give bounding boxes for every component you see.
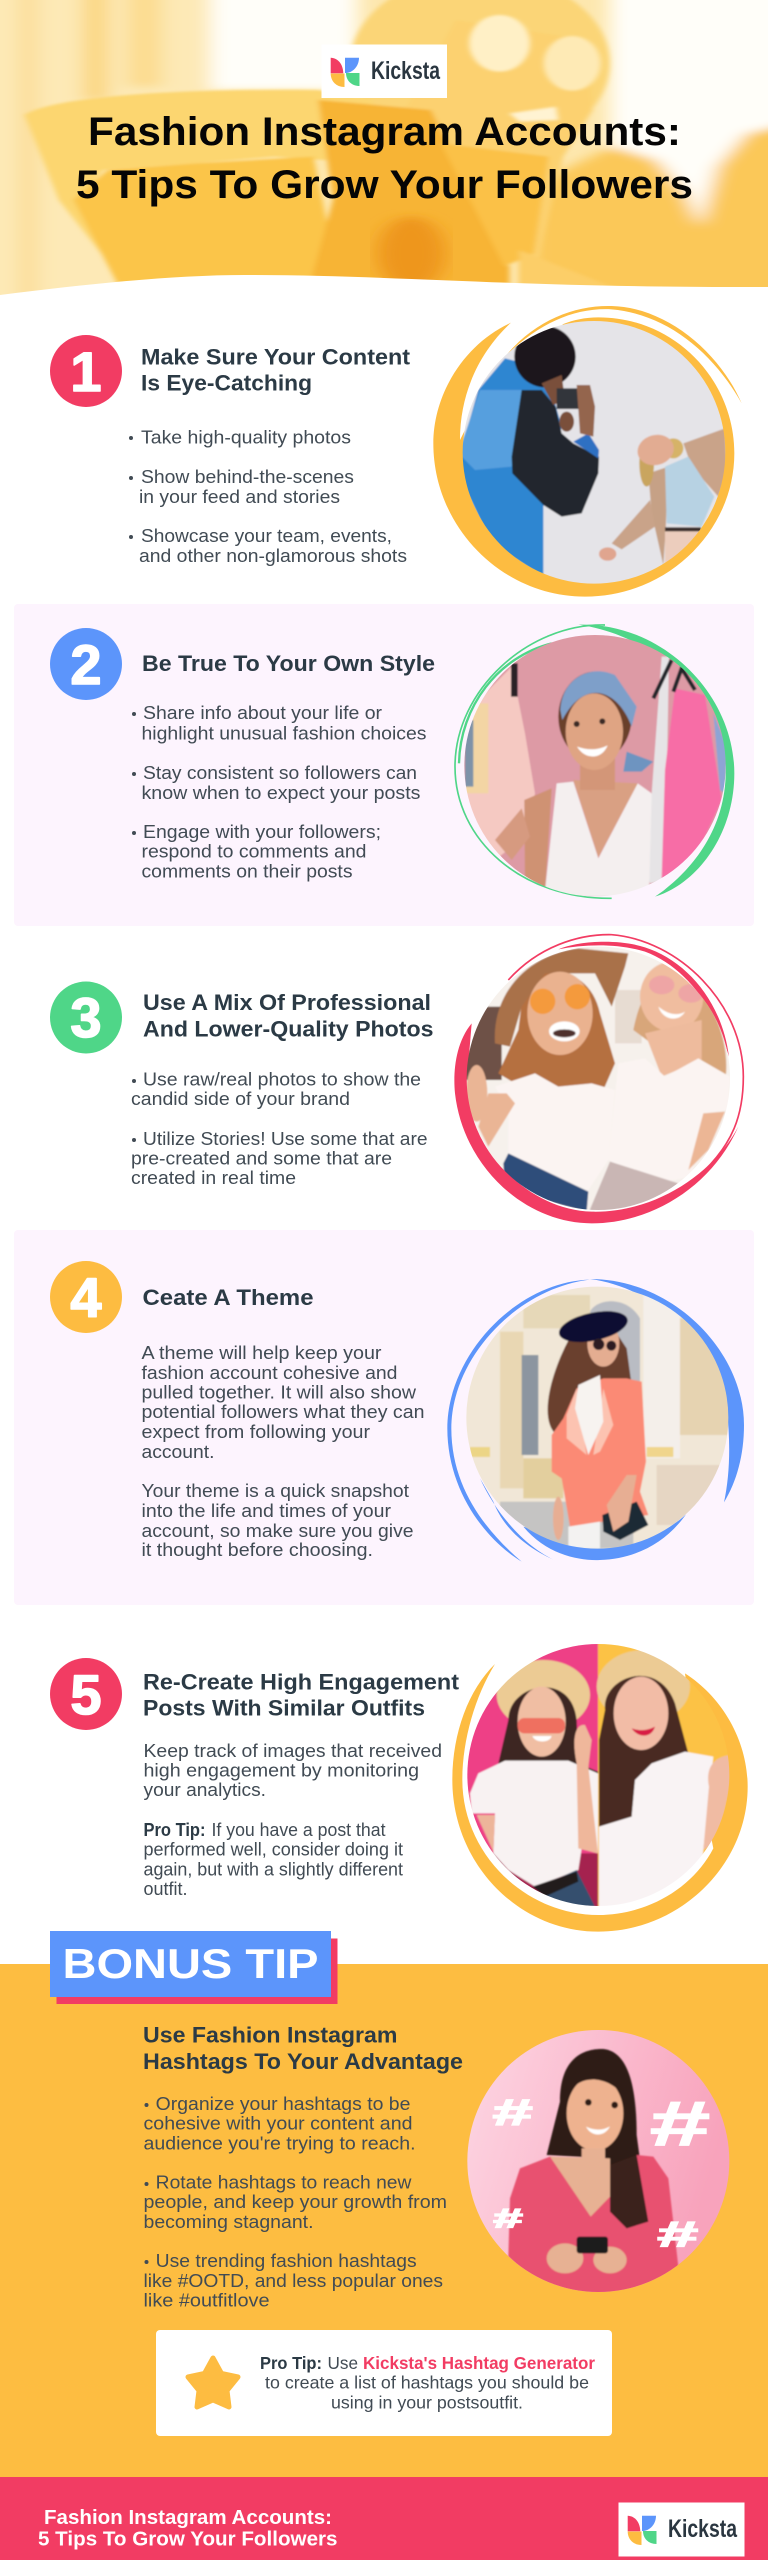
pro tip text: Use — [328, 2353, 358, 2373]
body text 4 — [142, 1342, 424, 1560]
title: 5 Tips To Grow Your Followers — [76, 163, 693, 207]
logo: Kicksta footer — [618, 2502, 744, 2556]
body text 4: expect from following your — [142, 1421, 370, 1442]
heading 5 — [143, 1670, 460, 1720]
body text 4: account. — [142, 1441, 214, 1462]
bullet list 3 — [131, 1068, 428, 1188]
pro tip text: using in your postsoutfit. — [331, 2392, 523, 2412]
bullet list 3: Use raw/real photos to show the — [143, 1068, 421, 1090]
heading 3: Use A Mix Of Professional — [143, 990, 431, 1015]
number badge 5: 5 — [70, 1663, 102, 1726]
hashtag marks — [492, 2099, 710, 2248]
panel: tip 4 — [50, 1261, 744, 1562]
bullet list 1: and other non-glamorous shots — [139, 545, 407, 566]
body text 5: If you have a post that — [212, 1819, 386, 1840]
body text 4: fashion account cohesive and — [142, 1362, 398, 1383]
header photo banner — [0, 0, 768, 320]
pro tip text: Pro Tip: — [260, 2353, 322, 2373]
pro tip text: to create a list of hashtags you should be — [265, 2372, 589, 2392]
photo 5: before and after outfits — [452, 1640, 748, 1932]
bonus heading — [143, 2022, 463, 2074]
photo 4: woman in coral blazer — [447, 1279, 744, 1562]
bullet list 3: created in real time — [131, 1167, 296, 1188]
body text 5 — [144, 1740, 442, 1899]
panel: bonus tip content — [143, 2022, 729, 2436]
bonus heading: Hashtags To Your Advantage — [143, 2049, 463, 2074]
hashtag marks: # — [493, 2204, 523, 2234]
photo 3: two friends laughing — [454, 935, 743, 1223]
callout: pro tip — [156, 2330, 612, 2436]
body text 4: A theme will help keep your — [142, 1342, 382, 1363]
white wave edge — [0, 275, 768, 310]
bullet list 1 — [129, 426, 407, 566]
body text 4: Your theme is a quick snapshot — [142, 1480, 409, 1501]
photo 2: woman at clothes rack — [455, 625, 734, 903]
bullet list 2: Engage with your followers; — [143, 821, 381, 842]
number badge 3 — [50, 982, 122, 1054]
footer band — [0, 2477, 768, 2560]
heading 1: Make Sure Your Content — [141, 344, 411, 370]
panel: tip 2 background — [14, 604, 754, 926]
footer title: 5 Tips To Grow Your Followers — [38, 2528, 338, 2550]
pro tip text — [260, 2353, 595, 2412]
number badge 1 — [50, 335, 122, 407]
bullet list 3: Utilize Stories! Use some that are — [143, 1128, 428, 1149]
body text 4: into the life and times of your — [142, 1500, 391, 1521]
body text 5: again, but with a slightly different — [144, 1858, 403, 1880]
bonus bullet list: like #OOTD, and less popular ones — [144, 2270, 443, 2291]
body text 5: your analytics. — [144, 1779, 266, 1800]
panel: tip 2 — [50, 625, 734, 903]
photo 6: woman with phone and hashtags — [467, 2030, 729, 2295]
title: Fashion Instagram Accounts: — [88, 110, 681, 154]
bullet list 3: pre-created and some that are — [131, 1148, 392, 1168]
body text 5: Keep track of images that received — [144, 1740, 442, 1761]
body text 4: it thought before choosing. — [142, 1539, 373, 1560]
title — [76, 110, 693, 207]
body text 5: performed well, consider doing it — [144, 1838, 403, 1860]
bonus bullet list: Use trending fashion hashtags — [156, 2250, 417, 2271]
panel: tip 1 — [50, 306, 742, 597]
bullet list 1: Show behind-the-scenes — [141, 466, 354, 487]
heading 4: Ceate A Theme — [142, 1285, 314, 1310]
body text 5: outfit. — [144, 1878, 188, 1899]
hashtag marks: # — [493, 2092, 533, 2133]
heading 2: Be True To Your Own Style — [142, 651, 435, 676]
number badge 4: 4 — [70, 1266, 102, 1329]
number badge 2: 2 — [70, 633, 102, 696]
bonus bullet list: like #outfitlove — [144, 2290, 270, 2310]
heading 5: Posts With Similar Outfits — [143, 1696, 425, 1720]
body text 5: Pro Tip: — [144, 1819, 206, 1840]
bullet list 1: Showcase your team, events, — [141, 525, 392, 546]
bonus tip banner: BONUS TIP — [62, 1940, 318, 1987]
heading 5: Re-Create High Engagement — [143, 1670, 460, 1694]
bonus bullet list: Organize your hashtags to be — [156, 2093, 410, 2114]
number badge 2 — [50, 628, 122, 700]
body text 4: account, so make sure you give — [142, 1520, 414, 1541]
heading 1 — [141, 344, 411, 396]
bonus bullet list: becoming stagnant. — [144, 2211, 314, 2232]
panel: tip 3 — [50, 935, 743, 1223]
bonus tip background — [0, 1964, 768, 2477]
body text 4: pulled together. It will also show — [142, 1382, 417, 1402]
bonus tip banner — [50, 1931, 338, 2004]
hashtag marks: # — [657, 2216, 698, 2255]
bonus bullet list: people, and keep your growth from — [144, 2191, 447, 2212]
pro tip text: Kicksta's Hashtag Generator — [363, 2353, 595, 2373]
bonus bullet list: Rotate hashtags to reach new — [156, 2172, 412, 2192]
bullet list 2: know when to expect your posts — [142, 782, 420, 803]
bonus bullet list: audience you're trying to reach. — [144, 2132, 416, 2154]
heading 3: And Lower-Quality Photos — [143, 1016, 433, 1042]
logo: Kicksta top: Kicksta — [371, 57, 441, 85]
bonus bullet list: cohesive with your content and — [144, 2112, 412, 2134]
bullet list 1: in your feed and stories — [139, 486, 340, 507]
bullet list 2 — [132, 702, 426, 882]
bullet list 2: highlight unusual fashion choices — [142, 722, 426, 744]
bullet list 3: candid side of your brand — [131, 1088, 350, 1109]
bonus heading: Use Fashion Instagram — [143, 2022, 398, 2048]
panel: tip 4 background — [14, 1230, 754, 1605]
heading 1: Is Eye-Catching — [141, 370, 312, 396]
number badge 5 — [50, 1658, 122, 1730]
photo 1: photographer and model — [433, 306, 742, 597]
bullet list 2: Stay consistent so followers can — [143, 762, 417, 783]
bullet list 2: Share info about your life or — [143, 702, 382, 723]
heading 3 — [143, 990, 433, 1042]
bullet list 2: respond to comments and — [142, 840, 366, 862]
footer title — [38, 2507, 338, 2550]
bullet list 2: comments on their posts — [142, 860, 352, 882]
bullet list 1: Take high-quality photos — [141, 426, 351, 448]
hashtag marks: # — [650, 2090, 710, 2160]
number badge 1: 1 — [70, 340, 102, 403]
panel: tip 5 — [50, 1640, 748, 1932]
body text 5: high engagement by monitoring — [144, 1760, 419, 1780]
number badge 3: 3 — [70, 986, 102, 1049]
bonus bullet list — [144, 2093, 447, 2310]
logo: Kicksta footer: Kicksta — [668, 2515, 738, 2543]
number badge 4 — [50, 1261, 122, 1333]
logo: Kicksta top — [322, 44, 447, 98]
body text 4: potential followers what they can — [142, 1401, 424, 1422]
icon: star — [188, 2358, 238, 2407]
footer title: Fashion Instagram Accounts: — [44, 2507, 332, 2529]
